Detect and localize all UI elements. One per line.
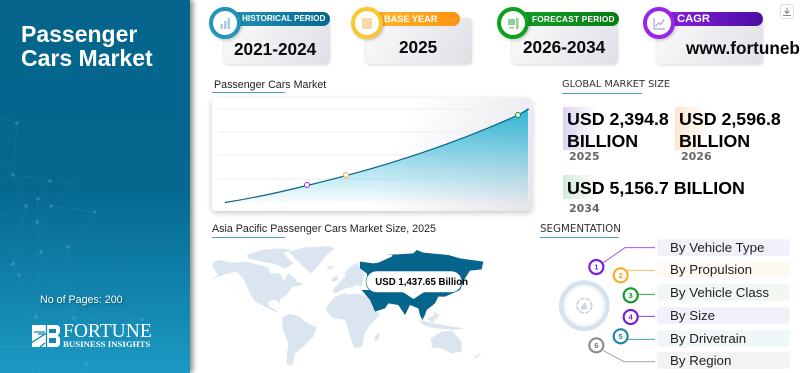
title: Cars Market bbox=[21, 45, 153, 71]
market size 2025 bbox=[563, 107, 669, 163]
stat card: base year bbox=[350, 6, 473, 66]
americas and western landmasses bbox=[210, 246, 355, 366]
center hub bbox=[561, 283, 607, 329]
node 6 bbox=[589, 338, 603, 352]
value: USD 2,596.8 bbox=[679, 109, 781, 129]
node 5: 5 bbox=[619, 332, 624, 341]
segment 5 bbox=[657, 330, 790, 347]
tint bbox=[563, 107, 597, 150]
logo wordmark: FORTUNE bbox=[63, 321, 152, 342]
value: USD 2,394.8 bbox=[567, 109, 669, 129]
heading: global market size: GLOBAL MARKET SIZE bbox=[562, 79, 670, 90]
network pattern bbox=[0, 117, 160, 373]
segment 3 bbox=[657, 284, 790, 301]
logo tagline: BUSINESS INSIGHTS bbox=[63, 339, 150, 349]
area chart bbox=[218, 108, 530, 204]
marker 2034 bbox=[516, 112, 520, 118]
heading: segmentation: SEGMENTATION bbox=[540, 223, 621, 235]
world map bbox=[210, 246, 484, 366]
node 3 bbox=[624, 288, 638, 302]
node 4 bbox=[624, 310, 638, 324]
node 3: 3 bbox=[629, 291, 633, 300]
heading: asia pacific: Asia Pacific Passenger Cars Market Size, 2025 bbox=[212, 223, 436, 235]
market size 2026 bbox=[675, 107, 781, 163]
segment 1: By Vehicle Type bbox=[670, 240, 764, 255]
pill label: HISTORICAL PERIOD bbox=[242, 14, 325, 23]
pill label: BASE YEAR bbox=[384, 14, 437, 24]
trend line bbox=[225, 109, 529, 202]
marker 2026 bbox=[344, 172, 348, 178]
value: 2025 bbox=[399, 37, 437, 57]
segment 3: By Vehicle Class bbox=[670, 285, 769, 300]
value: 2021-2024 bbox=[234, 39, 316, 59]
value: BILLION bbox=[679, 131, 750, 151]
node 1 bbox=[589, 260, 603, 274]
pill label bbox=[367, 12, 460, 26]
icon ring bbox=[351, 7, 383, 39]
download button bbox=[780, 4, 794, 19]
segment 4: By Size bbox=[670, 308, 715, 323]
connectors bbox=[603, 248, 655, 362]
card background bbox=[657, 18, 763, 64]
page count: No of Pages: 200 bbox=[40, 294, 123, 306]
stat card: forecast period bbox=[496, 6, 619, 66]
card background bbox=[224, 18, 330, 64]
callout value: USD 1,437.65 Billion bbox=[375, 277, 468, 288]
title bbox=[21, 21, 153, 71]
node 2 bbox=[614, 268, 628, 282]
segmentation labels bbox=[657, 239, 790, 369]
icon ring bbox=[643, 7, 675, 39]
asia pacific highlight bbox=[360, 250, 483, 320]
pill label bbox=[658, 12, 763, 26]
value: 2026-2034 bbox=[523, 37, 605, 57]
stat card: CAGR bbox=[642, 6, 800, 66]
icon ring bbox=[497, 7, 529, 39]
year: 2025 bbox=[569, 150, 600, 163]
segment 1 bbox=[657, 239, 790, 256]
marker 2025 bbox=[304, 182, 310, 188]
value: USD 5,156.7 BILLION bbox=[567, 178, 745, 198]
value bbox=[567, 109, 669, 151]
title: Passenger bbox=[21, 21, 137, 47]
logo mark bbox=[31, 325, 60, 348]
logo bbox=[31, 321, 152, 349]
area fill bbox=[225, 108, 528, 202]
segment 2: By Propulsion bbox=[670, 262, 752, 277]
tint bbox=[675, 107, 709, 150]
heading: market chart: Passenger Cars Market bbox=[214, 79, 326, 91]
value: www.fortuneb bbox=[686, 38, 800, 58]
sidebar panel bbox=[0, 0, 190, 373]
icon ring bbox=[209, 7, 241, 39]
segment 5: By Drivetrain bbox=[670, 331, 746, 346]
market size 2034 bbox=[563, 175, 745, 215]
year: 2034 bbox=[569, 202, 600, 215]
segment 2 bbox=[657, 261, 790, 278]
year: 2026 bbox=[681, 150, 712, 163]
segment 4 bbox=[657, 307, 790, 324]
eastern landmasses bbox=[345, 262, 482, 358]
segment 6 bbox=[657, 352, 790, 369]
value bbox=[679, 109, 781, 151]
pill label: FORECAST PERIOD bbox=[532, 14, 615, 24]
tint bbox=[563, 175, 597, 199]
segmentation diagram bbox=[559, 247, 655, 362]
node 2: 2 bbox=[619, 271, 623, 280]
card background bbox=[366, 18, 472, 64]
stat card: historical period bbox=[208, 6, 331, 66]
area chart panel bbox=[212, 98, 532, 211]
segment 6: By Region bbox=[670, 353, 731, 368]
node 6: 6 bbox=[594, 341, 598, 350]
value: BILLION bbox=[567, 131, 638, 151]
pill label bbox=[225, 12, 330, 26]
node 5 bbox=[614, 329, 628, 343]
pill label: CAGR bbox=[677, 13, 710, 25]
callout bbox=[366, 271, 468, 299]
node 1: 1 bbox=[594, 263, 599, 272]
node 4: 4 bbox=[629, 313, 634, 322]
card background bbox=[512, 18, 618, 64]
pill label bbox=[513, 12, 619, 26]
